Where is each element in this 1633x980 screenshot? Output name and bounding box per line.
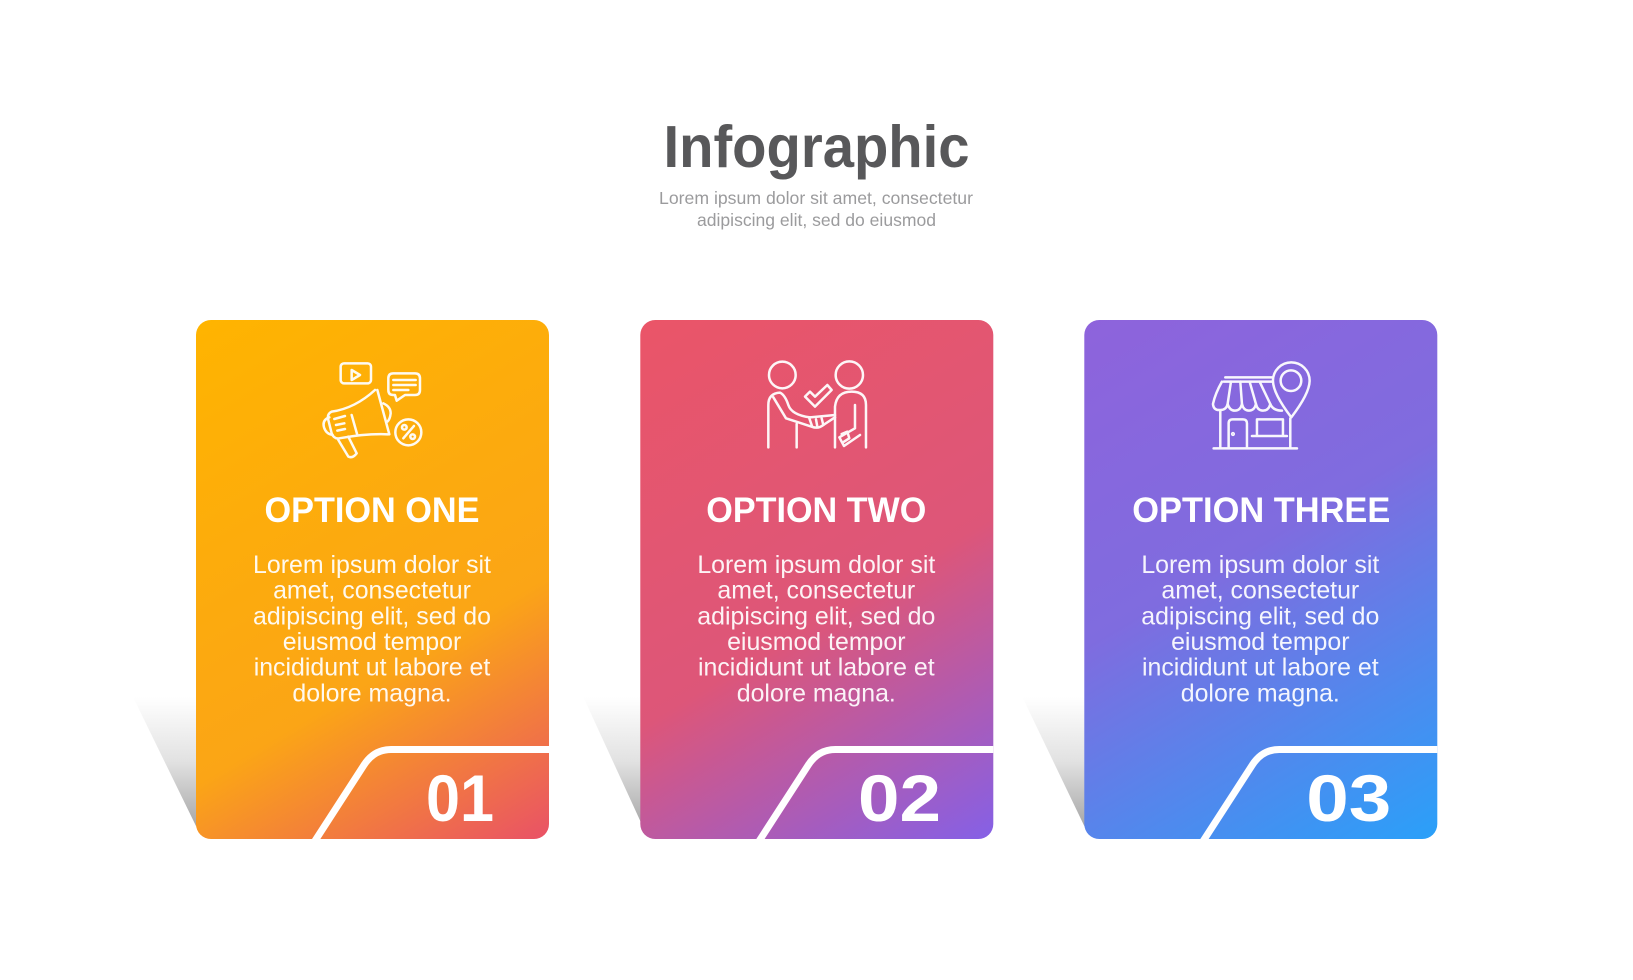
subtitle — [659, 188, 973, 230]
option title: OPTION THREE — [1132, 491, 1390, 530]
body text: eiusmod tempor — [727, 628, 906, 656]
number tab outline — [1199, 750, 1438, 847]
panel: option three — [1022, 320, 1438, 847]
body text: adipiscing elit, sed do — [1141, 602, 1379, 630]
panel: option two — [583, 320, 994, 847]
body text: Lorem ipsum dolor sit — [1141, 551, 1379, 579]
body text: Lorem ipsum dolor sit — [697, 551, 935, 579]
icon: handshake — [768, 361, 866, 447]
body text: eiusmod tempor — [1171, 628, 1350, 656]
body text: incididunt ut labore et — [698, 654, 935, 682]
card background — [196, 320, 549, 839]
infographic canvas — [142, 124, 1438, 839]
body text — [697, 551, 935, 707]
body text: amet, consectetur — [273, 577, 471, 605]
body text: amet, consectetur — [717, 577, 915, 605]
icon: store with map pin — [1213, 362, 1310, 448]
number: 03 — [1306, 761, 1391, 835]
body text: incididunt ut labore et — [1142, 654, 1379, 682]
card shadow — [133, 697, 201, 830]
body text — [1141, 551, 1379, 707]
panel: option one — [133, 320, 550, 847]
body text: amet, consectetur — [1161, 577, 1359, 605]
card shadow — [583, 697, 645, 828]
body text: dolore magna. — [737, 679, 896, 707]
number tab outline — [755, 750, 994, 847]
body text: dolore magna. — [292, 679, 452, 707]
subtitle: Lorem ipsum dolor sit amet, consectetur — [659, 188, 973, 208]
number: 02 — [858, 761, 941, 835]
subtitle: adipiscing elit, sed do eiusmod — [697, 210, 936, 230]
number tab outline — [311, 750, 550, 847]
option title: OPTION ONE — [264, 491, 480, 530]
title: Infographic — [664, 114, 970, 180]
body text: dolore magna. — [1181, 679, 1340, 707]
card background — [640, 320, 993, 839]
body text: adipiscing elit, sed do — [253, 602, 491, 630]
body text: adipiscing elit, sed do — [697, 602, 935, 630]
number: 01 — [426, 761, 494, 835]
card shadow — [1022, 697, 1089, 830]
body text: incididunt ut labore et — [254, 654, 490, 682]
card background — [1084, 320, 1437, 839]
option title: OPTION TWO — [706, 491, 926, 530]
body text — [253, 551, 491, 707]
icon: megaphone — [324, 363, 421, 457]
body text: eiusmod tempor — [283, 628, 461, 656]
body text: Lorem ipsum dolor sit — [253, 551, 491, 579]
